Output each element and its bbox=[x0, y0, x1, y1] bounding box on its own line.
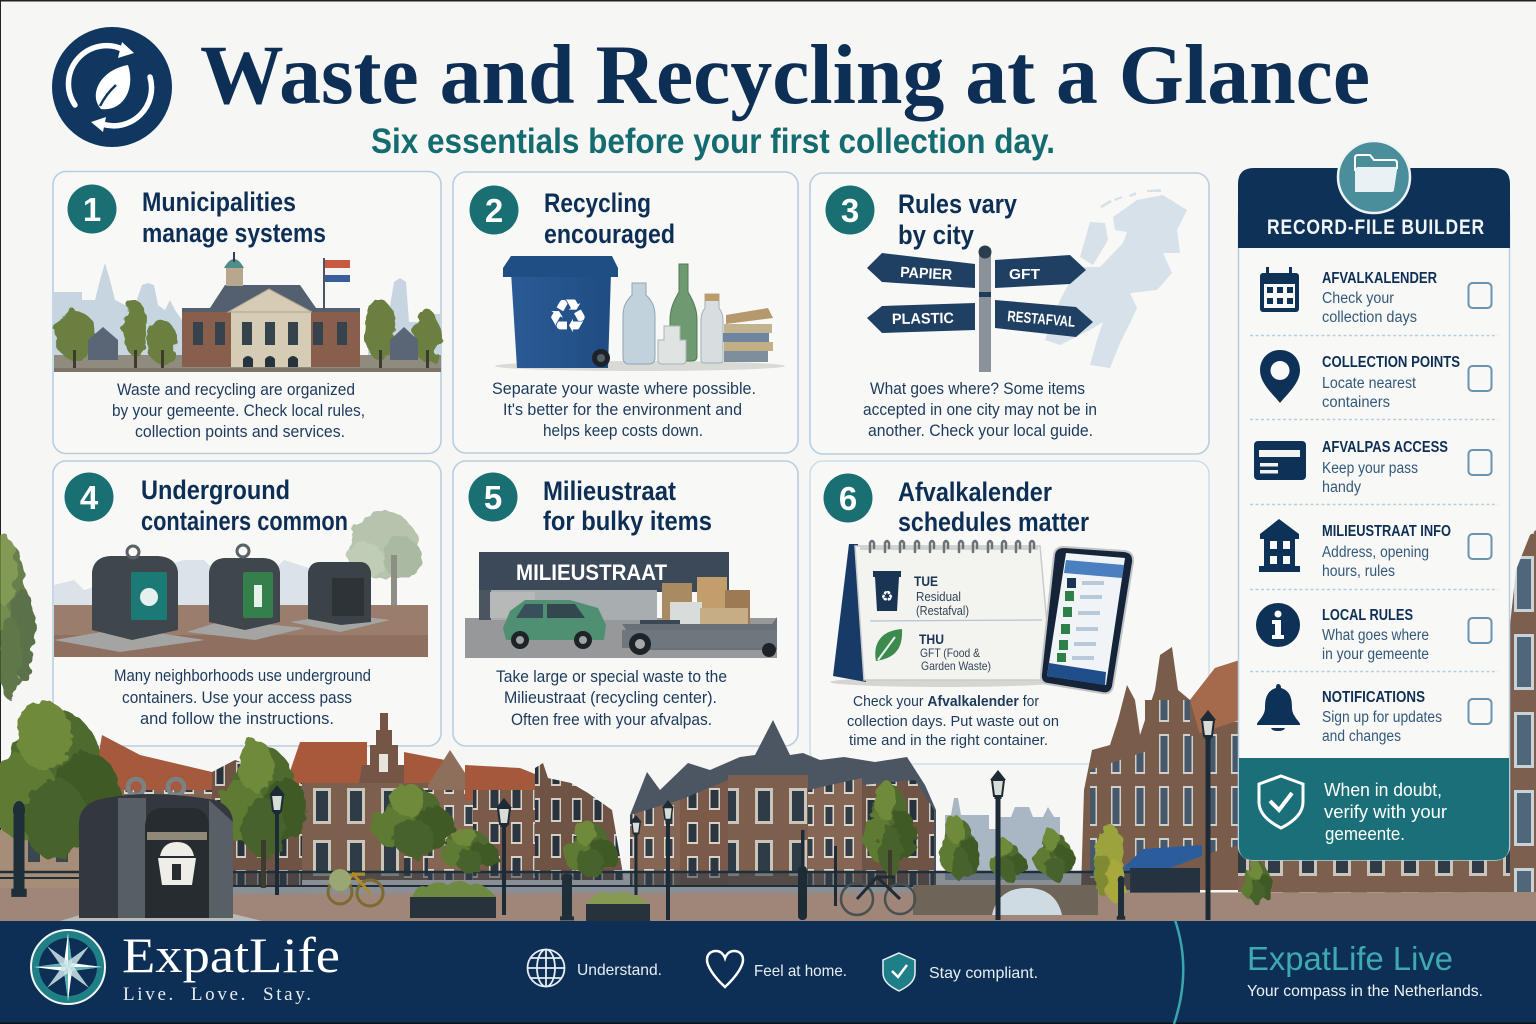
row: milieustraat info: MILIEUSTRAAT INFO bbox=[1322, 523, 1451, 540]
text 3: accepted in one city may not be in bbox=[863, 401, 1097, 419]
brand tagline: Your compass in the Netherlands. bbox=[1247, 983, 1483, 1000]
value: stay compliant: Stay compliant. bbox=[929, 965, 1038, 982]
heading 4: containers common bbox=[141, 506, 348, 536]
heading 5: Milieustraat bbox=[543, 476, 676, 506]
panel: card 2 recycling bbox=[453, 172, 798, 453]
trees bbox=[0, 535, 1274, 905]
calendar text thu: Garden Waste) bbox=[921, 659, 991, 673]
large underground bin bbox=[60, 779, 262, 921]
brand wordmark: Live. Love. Stay. bbox=[123, 984, 311, 1005]
map of the Netherlands bbox=[1045, 189, 1187, 368]
text 4: Many neighborhoods use underground bbox=[114, 667, 371, 685]
number badge 1 bbox=[68, 184, 116, 234]
number badge 3: 3 bbox=[841, 192, 859, 229]
calendar text thu: THU bbox=[919, 631, 944, 647]
number badge 5 bbox=[468, 472, 518, 522]
heading 5 bbox=[543, 476, 712, 536]
value: stay compliant bbox=[883, 953, 1038, 991]
planters bbox=[410, 881, 650, 921]
text 2: Separate your waste where possible. bbox=[492, 380, 756, 398]
value: feel at home bbox=[707, 951, 847, 987]
illustration: town hall bbox=[54, 252, 441, 372]
icon: building bbox=[1259, 519, 1300, 572]
icon: calendar bbox=[1260, 267, 1299, 312]
illustration: signpost: PLASTIC bbox=[892, 310, 954, 328]
subtitle: Six essentials before your first collection day. bbox=[371, 122, 1055, 161]
bridge bbox=[913, 885, 1098, 915]
illustration: signpost: PAPIER bbox=[900, 264, 953, 284]
canal-side band bbox=[232, 872, 1132, 894]
panel: card 5 milieustraat bbox=[453, 461, 798, 746]
heading 2 bbox=[544, 188, 675, 249]
row: notifications: NOTIFICATIONS bbox=[1322, 689, 1425, 706]
heading 1 bbox=[142, 187, 326, 248]
number badge 4: 4 bbox=[80, 479, 99, 516]
text 1: Waste and recycling are organized bbox=[117, 381, 355, 399]
row: afvalkalender: collection days bbox=[1322, 309, 1417, 326]
footer band bbox=[0, 920, 1536, 1024]
row: local rules: in your gemeente bbox=[1322, 646, 1429, 663]
number badge 6: 6 bbox=[839, 480, 857, 517]
row: afvalpas access: handy bbox=[1322, 479, 1361, 496]
heading 6: schedules matter bbox=[898, 507, 1089, 537]
text 2 bbox=[492, 380, 756, 440]
number badge 3 bbox=[826, 186, 874, 234]
illustration: containers on brick plaza bbox=[54, 511, 428, 657]
street ground bbox=[0, 888, 1536, 924]
row: collection points: Locate nearest bbox=[1322, 375, 1417, 392]
text 4: and follow the instructions. bbox=[140, 710, 334, 728]
value: feel at home: Feel at home. bbox=[754, 963, 847, 980]
illustration: Dutch street scene bbox=[0, 530, 1536, 924]
calendar text tue bbox=[914, 573, 969, 618]
illustration: blue bin with bottles and paper bbox=[495, 256, 785, 371]
row: afvalkalender: AFVALKALENDER bbox=[1322, 270, 1437, 287]
number badge 2 bbox=[470, 186, 518, 234]
residual bin icon bbox=[873, 571, 901, 611]
callout: verify with gemeente: verify with your bbox=[1324, 802, 1447, 822]
row: milieustraat info bbox=[1259, 519, 1492, 580]
row: notifications: Sign up for updates bbox=[1322, 709, 1442, 726]
calendar text tue: (Restafval) bbox=[916, 604, 969, 618]
heading 2: encouraged bbox=[544, 219, 675, 249]
railings bbox=[0, 872, 1130, 886]
text 6: Check your Afvalkalender for bbox=[853, 693, 1039, 710]
callout: verify with gemeente: When in doubt, bbox=[1324, 780, 1442, 800]
row: afvalpas access bbox=[1254, 439, 1492, 496]
icon: pass card bbox=[1254, 441, 1306, 480]
row: collection points bbox=[1260, 350, 1492, 411]
illustration: phone app bbox=[1041, 547, 1133, 693]
heading 3: by city bbox=[898, 220, 974, 250]
text 5: Take large or special waste to the bbox=[496, 668, 727, 686]
icon: info bbox=[1256, 603, 1300, 647]
text 3 bbox=[863, 380, 1097, 440]
illustration: signpost: RESTAFVAL bbox=[1007, 308, 1076, 331]
sidebar header bbox=[1238, 141, 1510, 248]
text 4 bbox=[114, 667, 371, 728]
number badge 6 bbox=[824, 474, 872, 522]
panel: card 3 rules vary bbox=[810, 173, 1209, 454]
text 6: collection days. Put waste out on bbox=[847, 713, 1059, 730]
calendar text tue: TUE bbox=[914, 573, 938, 589]
icon: shield check bbox=[1259, 776, 1303, 828]
row: milieustraat info: Address, opening bbox=[1322, 544, 1429, 561]
brand wordmark bbox=[122, 927, 340, 1005]
footer curve bbox=[1174, 920, 1183, 1024]
illustration: recycling centre, car and trailer bbox=[465, 552, 777, 658]
left brick houses bbox=[0, 713, 624, 890]
centre brick houses bbox=[630, 720, 936, 885]
number badge 2: 2 bbox=[485, 192, 503, 229]
illustration: desk calendar bbox=[830, 541, 1060, 687]
calendar text thu: GFT (Food & bbox=[920, 646, 980, 660]
title: Waste and Recycling at a Glance bbox=[200, 28, 1370, 122]
heading 1: Municipalities bbox=[142, 187, 296, 217]
value: understand bbox=[528, 950, 662, 986]
residual bin icon: ♻ bbox=[881, 589, 893, 605]
text 4: containers. Use your access pass bbox=[122, 689, 352, 707]
sign text: MILIEUSTRAAT bbox=[516, 560, 668, 585]
heading 5: for bulky items bbox=[543, 506, 712, 536]
heading 4: Underground bbox=[141, 475, 290, 505]
heading 4 bbox=[141, 475, 348, 536]
row: notifications bbox=[1257, 684, 1492, 745]
callout: verify with gemeente: gemeente. bbox=[1325, 824, 1405, 844]
bicycles bbox=[328, 874, 915, 915]
text 1 bbox=[112, 381, 365, 441]
lamps and bollards bbox=[11, 710, 1216, 920]
sidebar header: RECORD-FILE BUILDER bbox=[1267, 216, 1485, 239]
row: afvalpas access: Keep your pass bbox=[1322, 460, 1418, 477]
icon: map pin bbox=[1260, 350, 1300, 403]
right brick houses bbox=[1081, 530, 1536, 920]
folder badge bbox=[1338, 141, 1410, 213]
row: afvalkalender bbox=[1260, 267, 1492, 326]
heading 6 bbox=[898, 477, 1089, 537]
text 2: helps keep costs down. bbox=[543, 422, 703, 440]
brand tagline: ExpatLife Live bbox=[1247, 940, 1453, 977]
distant skyline bbox=[945, 798, 1060, 880]
callout: verify with gemeente bbox=[1239, 758, 1509, 860]
calendar text thu bbox=[919, 631, 991, 673]
text 1: collection points and services. bbox=[135, 423, 345, 441]
row: collection points: containers bbox=[1322, 394, 1390, 411]
compass logo bbox=[31, 930, 105, 1004]
text 3: What goes where? Some items bbox=[870, 380, 1085, 398]
heading 2: Recycling bbox=[544, 188, 651, 218]
row: local rules: What goes where bbox=[1322, 627, 1429, 644]
row: collection points: COLLECTION POINTS bbox=[1322, 354, 1460, 371]
icon: bell bbox=[1257, 684, 1300, 731]
text 3: another. Check your local guide. bbox=[868, 422, 1093, 440]
illustration: signpost: GFT bbox=[1009, 266, 1040, 283]
illustration: signpost bbox=[867, 246, 1093, 372]
panel: card 6 afvalkalender bbox=[810, 461, 1209, 764]
illustration: blue bin with bottles and paper: ♻ bbox=[547, 289, 589, 343]
brand tagline bbox=[1247, 940, 1483, 1000]
text 5: Often free with your afvalpas. bbox=[511, 711, 712, 729]
text 5: Milieustraat (recycling center). bbox=[504, 689, 717, 707]
heading 6: Afvalkalender bbox=[898, 477, 1052, 507]
logo: recycling leaf bbox=[52, 27, 172, 147]
calendar text tue: Residual bbox=[916, 590, 961, 604]
number badge 5: 5 bbox=[484, 479, 502, 516]
value: understand: Understand. bbox=[577, 962, 662, 979]
heading 3 bbox=[898, 189, 1017, 250]
row: local rules bbox=[1256, 603, 1492, 663]
number badge 4 bbox=[64, 472, 114, 522]
row: afvalkalender: Check your bbox=[1322, 290, 1394, 307]
text 5 bbox=[496, 668, 727, 729]
panel: card 1 municipalities bbox=[53, 172, 441, 454]
brand wordmark: ExpatLife bbox=[122, 927, 340, 983]
panel: card 4 underground containers bbox=[53, 461, 441, 746]
leaf icon bbox=[875, 629, 902, 661]
text 6 bbox=[847, 693, 1059, 749]
text 1: by your gemeente. Check local rules, bbox=[112, 402, 365, 420]
text 6: time and in the right container. bbox=[849, 732, 1048, 749]
text 2: It's better for the environment and bbox=[503, 401, 742, 419]
row: milieustraat info: hours, rules bbox=[1322, 563, 1395, 580]
panel: record-file builder bbox=[1238, 141, 1510, 860]
row: notifications: and changes bbox=[1322, 728, 1401, 745]
row: afvalpas access: AFVALPAS ACCESS bbox=[1322, 439, 1448, 456]
row: local rules: LOCAL RULES bbox=[1322, 607, 1413, 624]
number badge 1: 1 bbox=[83, 191, 101, 228]
heading 1: manage systems bbox=[142, 218, 326, 248]
flowers on bike bbox=[329, 869, 351, 891]
heading 3: Rules vary bbox=[898, 189, 1017, 219]
